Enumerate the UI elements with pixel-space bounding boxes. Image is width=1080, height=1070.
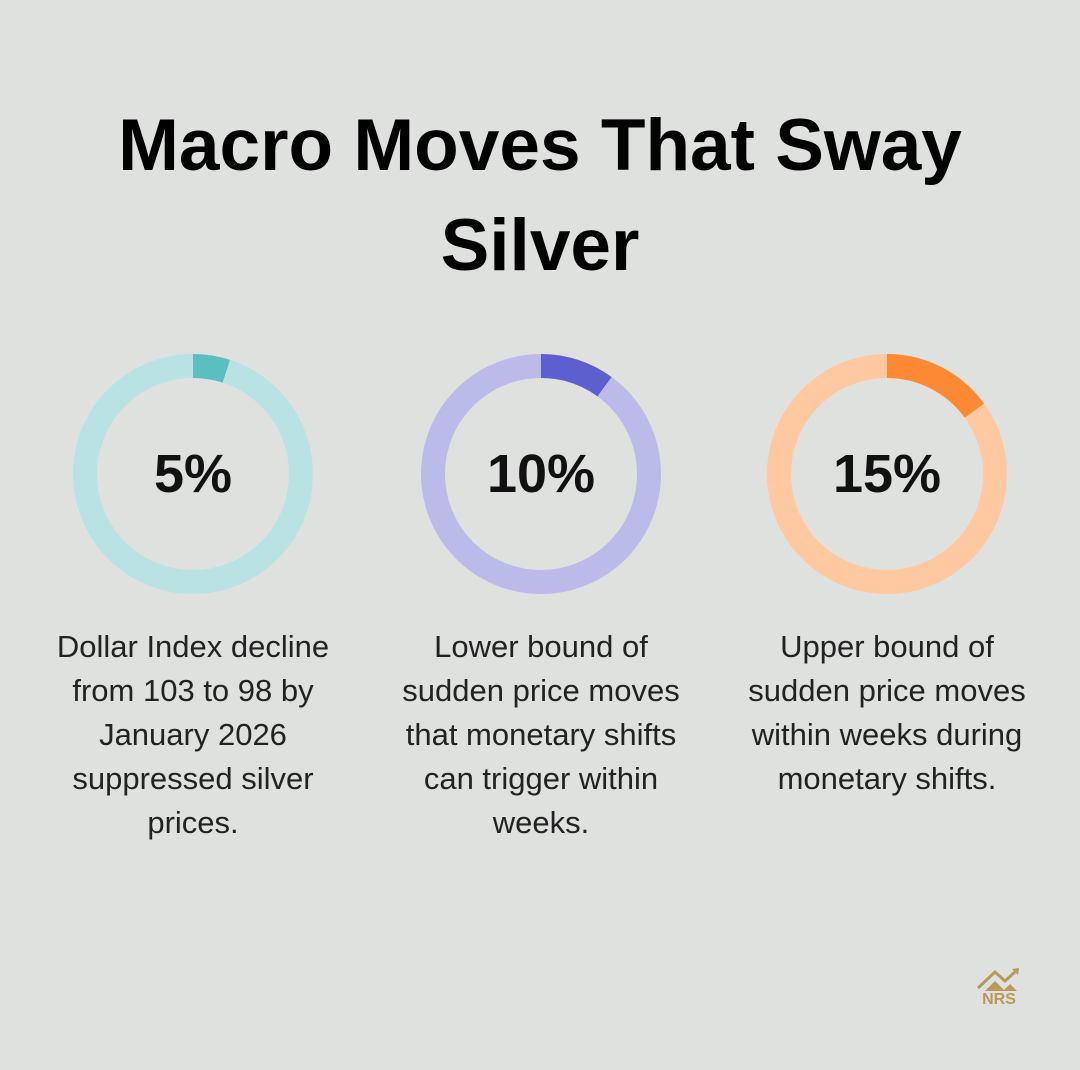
title: Silver: [441, 205, 639, 286]
text: 10% description: Lower bound of: [434, 629, 648, 664]
logo: NRS: NRS: [982, 991, 1016, 1008]
text: 5% description: Dollar Index decline: [57, 629, 329, 664]
text: 10% description: can trigger within: [424, 761, 658, 796]
text: 5% description: prices.: [147, 805, 239, 840]
text: 5% description: January 2026: [99, 717, 287, 752]
logo: NRS: [977, 968, 1019, 1008]
text: 10% description: [402, 629, 680, 840]
donut: 15%: 15%: [833, 444, 941, 504]
title: Macro Moves That Sway: [118, 105, 962, 186]
text: 10% description: weeks.: [493, 805, 589, 840]
text: 5% description: from 103 to 98 by: [72, 673, 314, 708]
text: 10% description: that monetary shifts: [406, 717, 676, 752]
donut: 15%: [767, 354, 1007, 594]
text: 15% description: sudden price moves: [748, 673, 1026, 708]
donut: 10%: 10%: [487, 444, 595, 504]
text: 10% description: sudden price moves: [402, 673, 680, 708]
text: 15% description: Upper bound of: [780, 629, 994, 664]
donut: 5%: 5%: [154, 444, 232, 504]
text: 15% description: within weeks during: [752, 717, 1022, 752]
text: 15% description: monetary shifts.: [778, 761, 996, 796]
text: 5% description: [57, 629, 329, 840]
text: 15% description: [748, 629, 1026, 796]
donut: 5%: [73, 354, 313, 594]
title: [118, 105, 962, 286]
donut: 10%: [421, 354, 661, 594]
text: 5% description: suppressed silver: [72, 761, 314, 796]
